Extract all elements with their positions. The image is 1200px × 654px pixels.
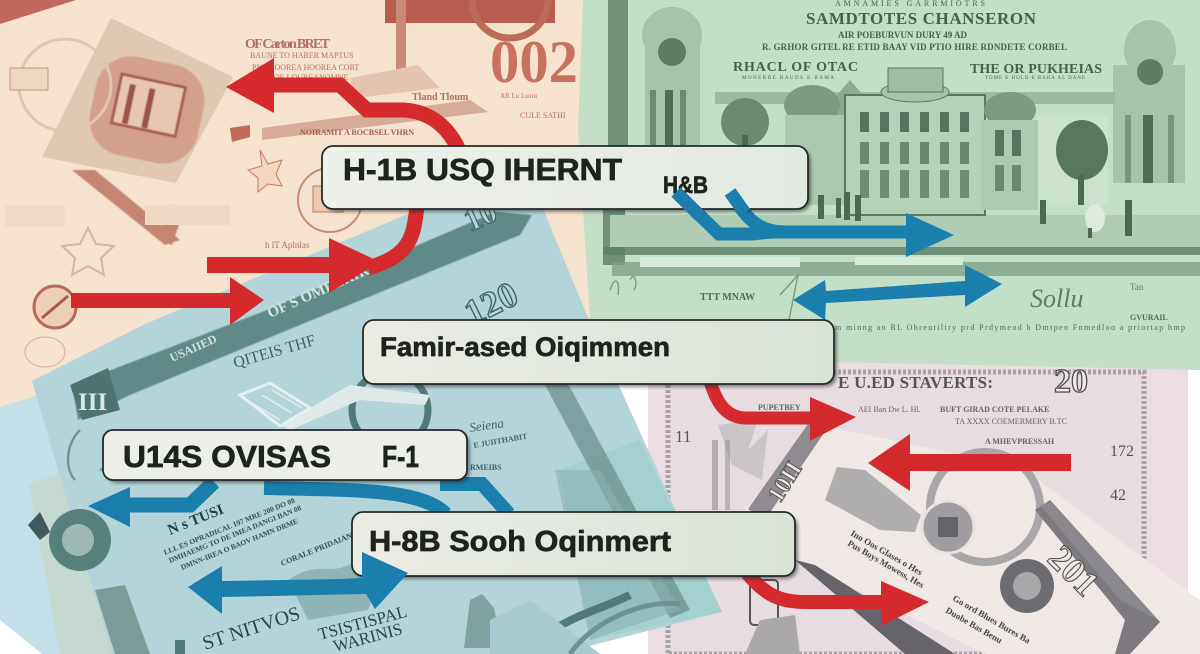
panel: pink banknote sheet: 172 [1110,443,1134,460]
panel: pale left sheet [0,385,130,654]
panel: teal banknote sheet: OF S OMBERIRT [265,259,380,322]
arrow: blue double-headed lower left [188,552,408,614]
panel: teal banknote sheet: 10 [458,192,502,238]
panel: peach certificate sheet: AR Lu Lustu [500,92,537,100]
panel: pink banknote sheet: TA XXXX COEMERMERY B.TC [955,417,1067,426]
panel: peach certificate sheet: h lT Aplnlas [265,240,310,250]
signatures and fine print [610,275,1185,332]
label: H-1B card [322,146,811,212]
panel: tilted dollar note: 201 [1040,537,1107,604]
certificate headings [733,0,1102,81]
signatures and fine print: Tan [1130,282,1144,292]
arrow: blue over H-1B card [676,192,745,216]
panel: teal banknote sheet: TSISTISPAL [316,602,409,644]
panel: pink banknote sheet: 42 [1110,487,1126,504]
certificate headings: R. GRHOR GITEL RE ETID BAAY VID PTIO HIRE RDNDETE CORBEL [762,42,1067,52]
panel: teal banknote sheet: CORALE PRIDAIAN [279,531,354,568]
label: family-based card: Famir-ased Oiqimmen [380,332,670,362]
building: right tower [1113,20,1185,183]
arrow: red curved under first label [207,205,417,293]
arrow: blue double-headed right [793,265,1002,320]
panel: teal banknote sheet: N s TUSI [166,502,226,539]
certificate headings: RHACL OF OTAC [733,60,858,75]
panel: teal banknote sheet: Seiena [468,415,505,435]
arrow: red pointing left [868,434,1071,491]
panel: peach certificate sheet: Tland Tloum [412,92,469,103]
signatures and fine print: GVURAIL [1130,313,1168,322]
panel: teal banknote sheet: ST NITVOS [200,603,303,654]
panel: green certificate sheet [578,0,1200,384]
panel: tilted dollar note: Duobe Bas Benu [944,605,1004,645]
panel: peach certificate sheet: PNA LOOREA HOOREA CORT [252,63,359,72]
certificate headings: AIR POEBURVUN DURY 49 AD [838,30,968,40]
label: family-based card [363,320,837,387]
label: U14S visas card: U14S OVISAS [123,439,331,474]
certificate headings: SAMDTOTES CHANSERON [806,9,1037,28]
certificate headings: THE OR PUKHEIAS [970,62,1102,77]
panel: teal banknote sheet [28,165,722,654]
panel: pink banknote sheet: 20 [1054,363,1088,400]
figures on the plaza [818,192,1132,238]
panel: teal banknote sheet: E JUIITHABIT [473,432,529,450]
panel: pink banknote sheet: BUFT GIRAD COTE PELAKE [940,405,1049,414]
panel: pink banknote sheet: A MHEVPRESSAH [985,437,1055,446]
panel: peach certificate sheet [0,0,600,420]
building: left tower [642,7,702,145]
panel: tilted dollar note: Go ord Blues Bures Ba [951,593,1033,646]
panel: teal banknote sheet: RMEIBS [470,463,502,472]
panel: teal banknote sheet: USAIIED [168,331,219,365]
label: H-1B card: H-1B USQ IHERNT [343,152,622,187]
arrow: red left lower [71,277,264,325]
panel: tilted dollar note: Pus Boys Mowess, Hes [846,538,926,590]
certificate headings: MONERDE BAUDS E BAMA [742,76,834,81]
arrow: red from second label [709,378,856,441]
arrow: blue right pair [676,192,954,257]
signatures and fine print: m minng an RL Ohreutiliry prd Prdymeod h Dmtpen Fnmedloo a priortap hmp [835,323,1185,332]
panel: teal banknote sheet: QITEIS THF [231,332,318,372]
label: U14S visas card: F-1 [382,439,419,474]
panel: pink banknote sheet: E U.ED STAVERTS: [838,373,993,392]
panel: tilted dollar note: Ino Oos Glases o Hes [849,528,925,577]
label: H-8B card [352,512,798,579]
panel: teal banknote sheet: 120 [458,274,524,333]
panel: peach certificate sheet: OF Carton BRET [245,37,331,52]
panel: pink banknote sheet [648,362,1188,654]
certificate headings: TDME E HOLD E BAHA AL DANE [985,76,1085,81]
signatures and fine print: TTT MNAW [700,292,755,303]
panel: peach certificate sheet: BAUNE TO HARER MAPTUS [250,51,354,60]
label: U14S visas card [103,430,470,483]
panel: pink banknote sheet: AEI Ban Dw L. Hl. [858,405,921,414]
label: H-1B card: H&B [663,172,708,199]
arrow: blue left from third label [88,482,214,527]
arrow: red from fourth label [747,573,929,626]
building: central facade [715,68,1115,215]
label: H-8B card: H-8B Sooh Oqinmert [369,526,671,558]
panel: teal banknote sheet: DMNN-IREA O BAOV HAMN DRME [179,516,299,572]
arrow: red top-left [226,58,458,148]
panel: peach certificate sheet: A 1 MINOE LOUREANOMNE [245,73,348,82]
panel: tilted dollar note: 10II [763,457,808,507]
panel: peach certificate sheet: 002 [490,29,578,95]
panel: teal banknote sheet: LLL ES OPRADICAL 197 MRE 200 DO 08 [162,496,296,557]
panel: teal banknote sheet: DMHAEMG TO DE IMEA DANGI BAN 08 [167,503,303,565]
panel: tilted dollar note [745,424,1200,654]
panel: peach certificate sheet: NOIRAMIT A BOCBSEL VHRN [300,128,414,137]
panel: teal banknote sheet: III [78,389,107,416]
arrow: blue curves toward fourth label [264,484,509,514]
signatures and fine print: Sollu [1030,284,1083,313]
panel: peach certificate sheet: CULE SATHI [520,111,566,120]
panel: pink banknote sheet: 11 [675,427,691,446]
panel: pink banknote sheet: PUPETBEY [758,403,801,412]
